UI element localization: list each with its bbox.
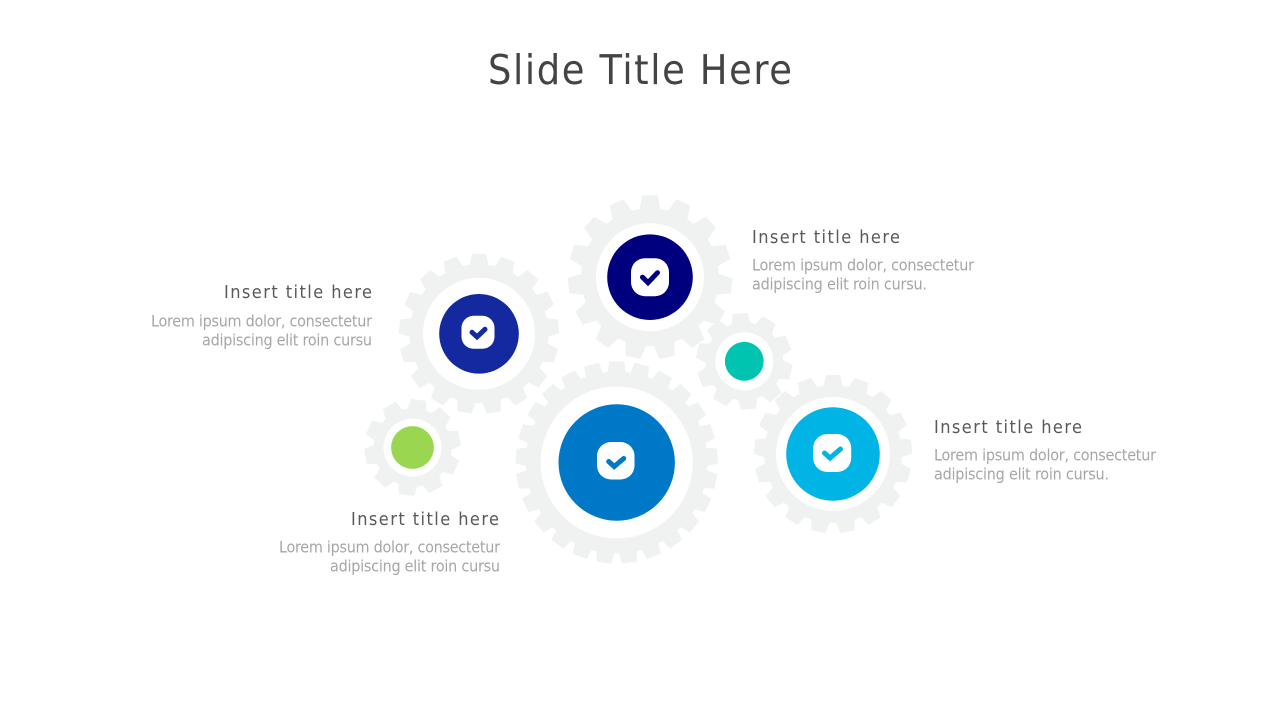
text block: top right: Lorem ipsum dolor, consectetur [752, 256, 974, 274]
text block: left: Insert title here [224, 282, 372, 303]
text block: bottom: Lorem ipsum dolor, consectetur [279, 538, 500, 556]
text block: right [934, 417, 1156, 484]
text block: top right [752, 227, 974, 294]
text block: left [151, 282, 372, 350]
title: Slide Title Here [488, 46, 792, 94]
gear: centre blue [515, 362, 718, 564]
gear: small green [358, 394, 467, 501]
text block: bottom [279, 509, 500, 576]
text block: right: Lorem ipsum dolor, consectetur [934, 446, 1156, 464]
text block: left: Lorem ipsum dolor, consectetur [151, 312, 372, 330]
text block: bottom: adipiscing elit roin cursu [330, 556, 500, 576]
text block: right: Insert title here [934, 417, 1082, 438]
gear: top navy [567, 195, 733, 360]
text block: bottom: Insert title here [351, 509, 499, 530]
text block: left: adipiscing elit roin cursu [202, 330, 372, 350]
gear: right cyan [753, 375, 913, 533]
text block: right: adipiscing elit roin cursu. [934, 464, 1109, 484]
gear: left indigo [398, 254, 560, 414]
text block: top right: adipiscing elit roin cursu. [752, 274, 927, 294]
gear: small teal [692, 309, 797, 413]
text block: top right: Insert title here [752, 227, 900, 248]
